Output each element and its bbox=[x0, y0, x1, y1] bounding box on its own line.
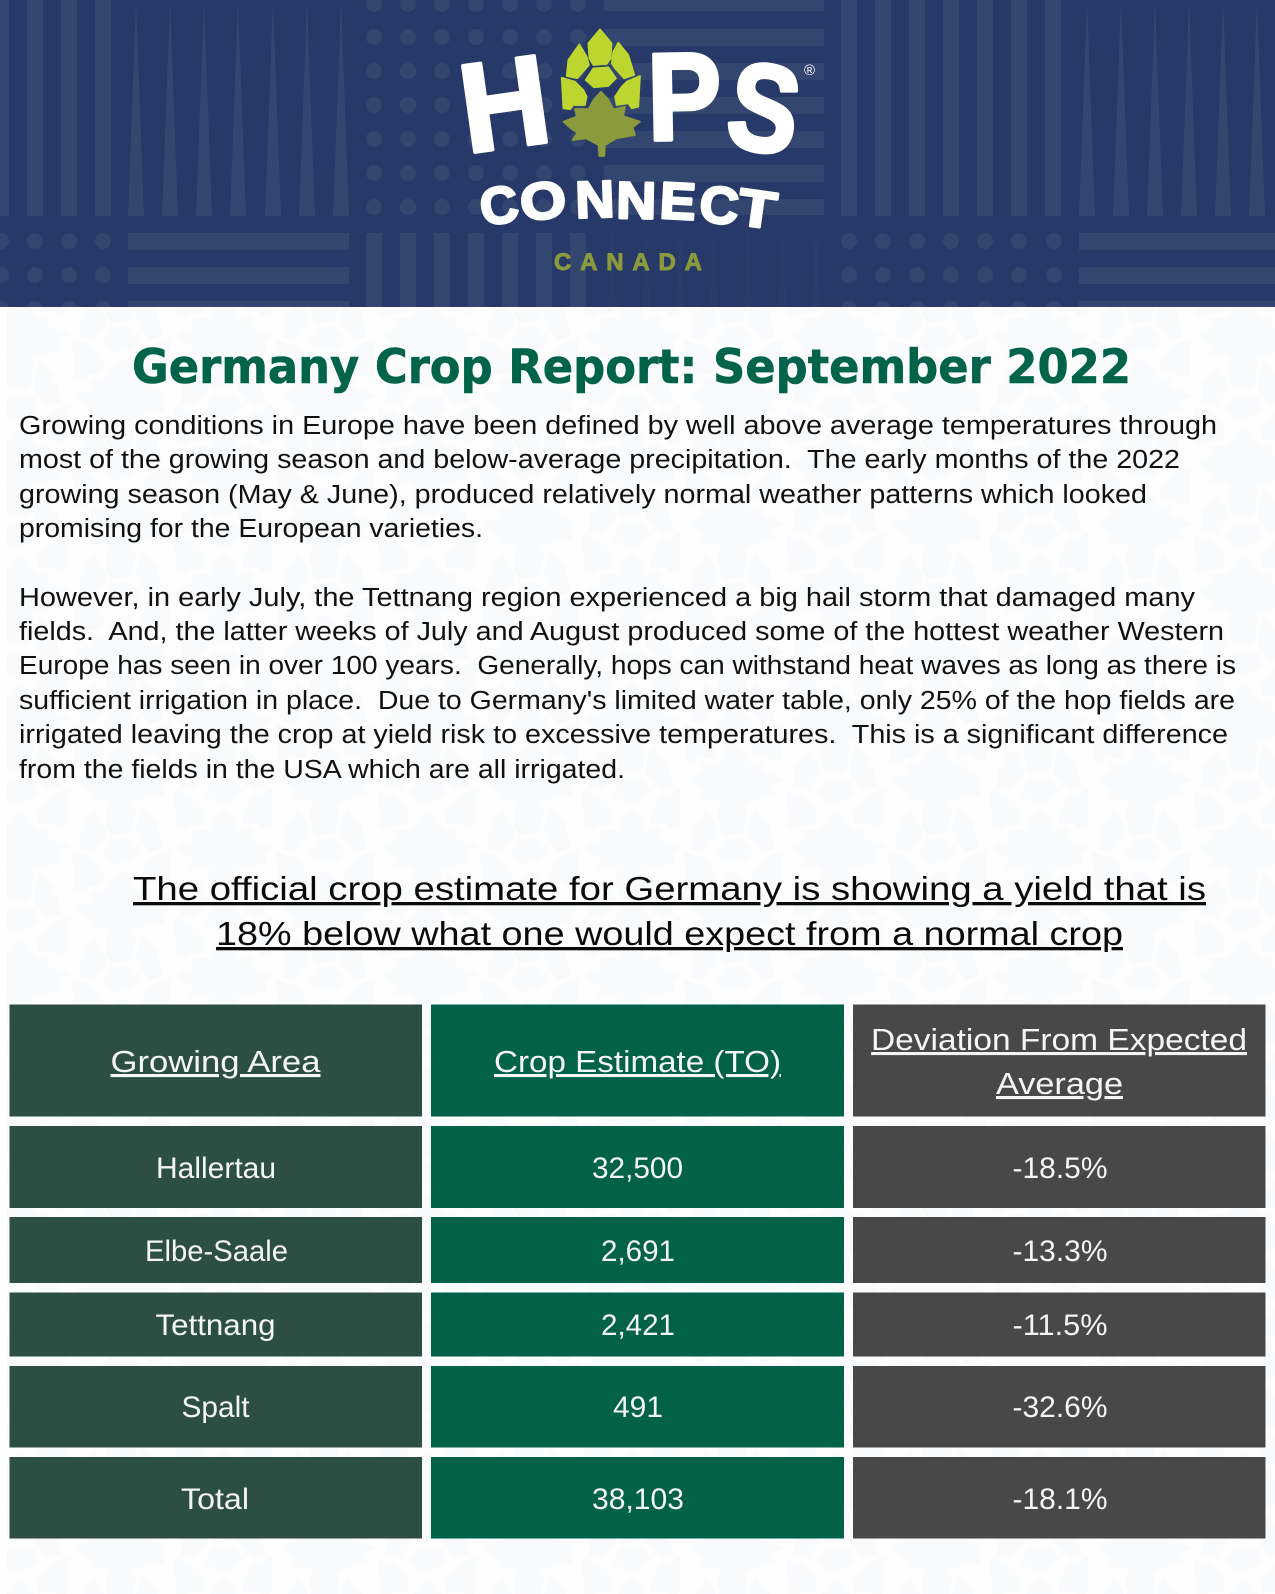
logo word: HOPS letters: S bbox=[719, 35, 810, 183]
column: growing area: Growing Area bbox=[110, 1044, 321, 1079]
column: crop estimate: 2,421 bbox=[601, 1309, 675, 1342]
logo word: CONNECT letters: C bbox=[697, 175, 742, 237]
column: crop estimate: 32,500 bbox=[592, 1152, 683, 1185]
column: crop estimate: 2,691 bbox=[601, 1235, 675, 1268]
logo word: CANADA: CANADA bbox=[554, 249, 702, 276]
text block: hail storm and heat: However, in early July, the Tettnang region experienced a big hail storm that damaged many bbox=[19, 584, 1195, 612]
text block: hail storm and heat bbox=[19, 584, 1236, 784]
dots bbox=[0, 0, 1062, 317]
text block: growing conditions: promising for the European varieties. bbox=[19, 515, 483, 543]
callout: official crop estimate: 18% below what one would expect from a normal crop bbox=[216, 915, 1123, 952]
logo word: HOPS letters bbox=[451, 28, 815, 183]
logo word: CONNECT letters: T bbox=[734, 178, 780, 241]
table: crop estimates bbox=[10, 1004, 1266, 1538]
text block: hail storm and heat: sufficient irrigation in place. Due to Germany's limited water table, only 25% of the hop fields are bbox=[19, 687, 1235, 715]
column: deviation: Deviation From Expected bbox=[871, 1022, 1247, 1057]
text block: hail storm and heat: Europe has seen in over 100 years. Generally, hops can withstand heat waves as long as there is bbox=[19, 652, 1236, 680]
logo word: CONNECT letters: N bbox=[574, 171, 615, 230]
column: growing area bbox=[10, 1004, 422, 1538]
column: growing area: Hallertau bbox=[156, 1152, 276, 1185]
column: growing area: Spalt bbox=[182, 1391, 250, 1424]
logo word: HOPS letters: P bbox=[646, 28, 722, 167]
logo: Hops Connect Canada bbox=[451, 28, 815, 276]
column: deviation: -18.1% bbox=[1012, 1483, 1108, 1516]
logo word: CONNECT letters: O bbox=[517, 170, 569, 233]
logo word: CONNECT letters bbox=[476, 170, 780, 241]
text block: hail storm and heat: from the fields in the USA which are all irrigated. bbox=[19, 756, 625, 784]
column: deviation: Average bbox=[996, 1066, 1123, 1101]
callout: official crop estimate: The official crop estimate for Germany is showing a yield that is bbox=[133, 870, 1206, 907]
text block: growing conditions: growing season (May & June), produced relatively normal weather patterns which looked bbox=[19, 481, 1147, 509]
column: crop estimate: 38,103 bbox=[592, 1483, 684, 1516]
column: growing area: Tettnang bbox=[156, 1309, 276, 1342]
column: deviation bbox=[853, 1004, 1266, 1538]
logo word: HOPS letters: ® bbox=[804, 62, 815, 79]
text block: growing conditions bbox=[19, 412, 1217, 543]
callout: official crop estimate bbox=[133, 870, 1206, 952]
logo word: HOPS letters: H bbox=[451, 28, 558, 180]
text block: hail storm and heat: irrigated leaving the crop at yield risk to excessive temperatures. This is a significant difference bbox=[19, 721, 1228, 749]
column: growing area: Total bbox=[181, 1483, 249, 1516]
logo word: CONNECT letters: E bbox=[658, 172, 697, 232]
text block: growing conditions: Growing conditions in Europe have been defined by well above average temperatures through bbox=[19, 412, 1217, 440]
text block: hail storm and heat: fields. And, the latter weeks of July and August produced some of the hottest weather Western bbox=[19, 618, 1224, 646]
column: deviation: -13.3% bbox=[1012, 1235, 1108, 1268]
column: deviation: -18.5% bbox=[1012, 1152, 1108, 1185]
column: deviation: -11.5% bbox=[1012, 1309, 1108, 1342]
header band with woven pattern bbox=[0, 0, 1275, 317]
icon: hop cone with maple leaf bbox=[562, 29, 640, 156]
column: deviation: -32.6% bbox=[1012, 1391, 1108, 1424]
column: crop estimate bbox=[431, 1004, 844, 1538]
logo word: CONNECT letters: N bbox=[616, 172, 657, 231]
logo word: CONNECT letters: C bbox=[476, 175, 522, 238]
title: Germany Crop Report: September 2022 bbox=[132, 340, 1131, 395]
column: crop estimate: Crop Estimate (TO) bbox=[494, 1044, 781, 1079]
column: crop estimate: 491 bbox=[613, 1391, 663, 1424]
column: growing area: Elbe-Saale bbox=[145, 1235, 288, 1268]
text block: growing conditions: most of the growing season and below-average precipitation. The early months of the 2022 bbox=[19, 446, 1180, 474]
